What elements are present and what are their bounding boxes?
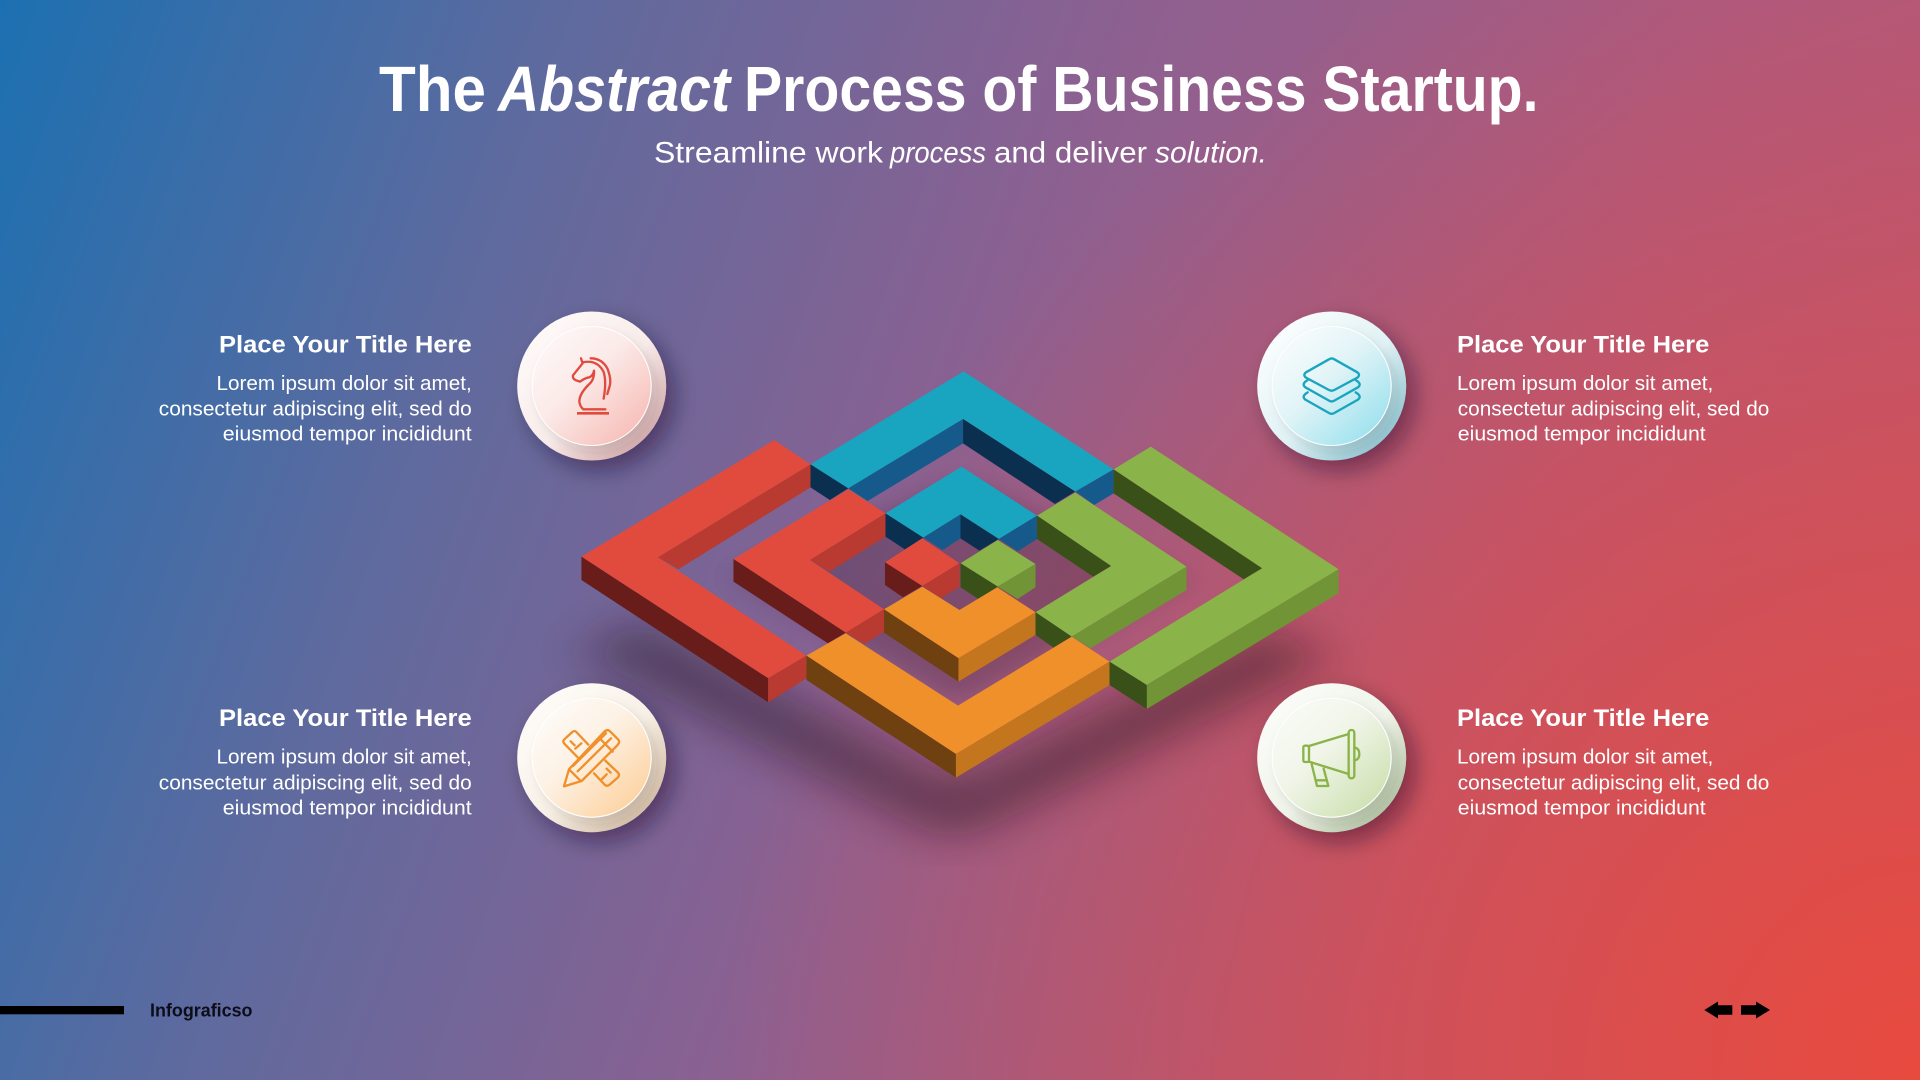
footer rule <box>0 1006 124 1014</box>
center red block <box>885 538 959 598</box>
subtitle: Streamline work <box>654 137 884 170</box>
title: The <box>379 53 486 125</box>
subtitle: and deliver <box>994 137 1147 170</box>
body text: Lorem ipsum dolor sit amet, <box>216 372 472 395</box>
panel: top left <box>159 331 472 446</box>
body text: eiusmod tempor incididunt <box>1458 423 1706 446</box>
subtitle: solution. <box>1155 137 1267 170</box>
body text: consectetur adipiscing elit, sed do <box>1458 398 1769 421</box>
subtitle: process <box>889 137 986 170</box>
icon: pencil and ruler badge <box>517 683 666 832</box>
title: Process of Business Startup. <box>744 53 1538 125</box>
heading: Place Your Title Here <box>219 705 472 732</box>
outer blue segment <box>811 371 1114 505</box>
inner orange segment <box>884 587 1036 682</box>
isometric concentric maze diagram <box>581 371 1339 778</box>
inner red segment <box>733 489 886 644</box>
body text: consectetur adipiscing elit, sed do <box>1458 771 1769 794</box>
icon: knight badge <box>517 312 666 460</box>
body text: Lorem ipsum dolor sit amet, <box>216 745 472 768</box>
panel: top right <box>1457 331 1769 446</box>
body text <box>1457 745 1769 819</box>
title <box>379 53 1538 125</box>
panel: bottom left <box>159 705 472 819</box>
body text <box>159 372 472 446</box>
body text: consectetur adipiscing elit, sed do <box>159 398 472 421</box>
heading: Place Your Title Here <box>1457 705 1709 732</box>
body text <box>1457 372 1769 446</box>
outer orange segment <box>806 633 1109 778</box>
body text: eiusmod tempor incididunt <box>1458 796 1706 819</box>
body text <box>159 745 472 819</box>
arrow: previous <box>1704 1002 1732 1018</box>
body text: consectetur adipiscing elit, sed do <box>159 771 472 794</box>
body text: eiusmod tempor incididunt <box>223 796 472 819</box>
body text: eiusmod tempor incididunt <box>223 423 472 446</box>
outer green segment <box>1109 447 1339 709</box>
footer brand label: Infograficso <box>150 1000 252 1021</box>
heading: Place Your Title Here <box>219 331 472 358</box>
title: Abstract <box>496 53 732 125</box>
icon: layers badge <box>1257 312 1406 460</box>
subtitle <box>654 137 1267 170</box>
soft shadow beneath the isometric diagram <box>611 480 1300 813</box>
panel: bottom right <box>1457 705 1769 819</box>
outer red segment <box>581 440 811 702</box>
inner blue segment <box>886 467 1037 551</box>
body text: Lorem ipsum dolor sit amet, <box>1457 745 1713 768</box>
inner green segment <box>1036 493 1187 648</box>
center green block <box>961 540 1036 599</box>
heading: Place Your Title Here <box>1457 331 1709 358</box>
body text: Lorem ipsum dolor sit amet, <box>1457 372 1713 395</box>
arrow: next <box>1741 1002 1770 1018</box>
icon: megaphone badge <box>1257 683 1406 832</box>
